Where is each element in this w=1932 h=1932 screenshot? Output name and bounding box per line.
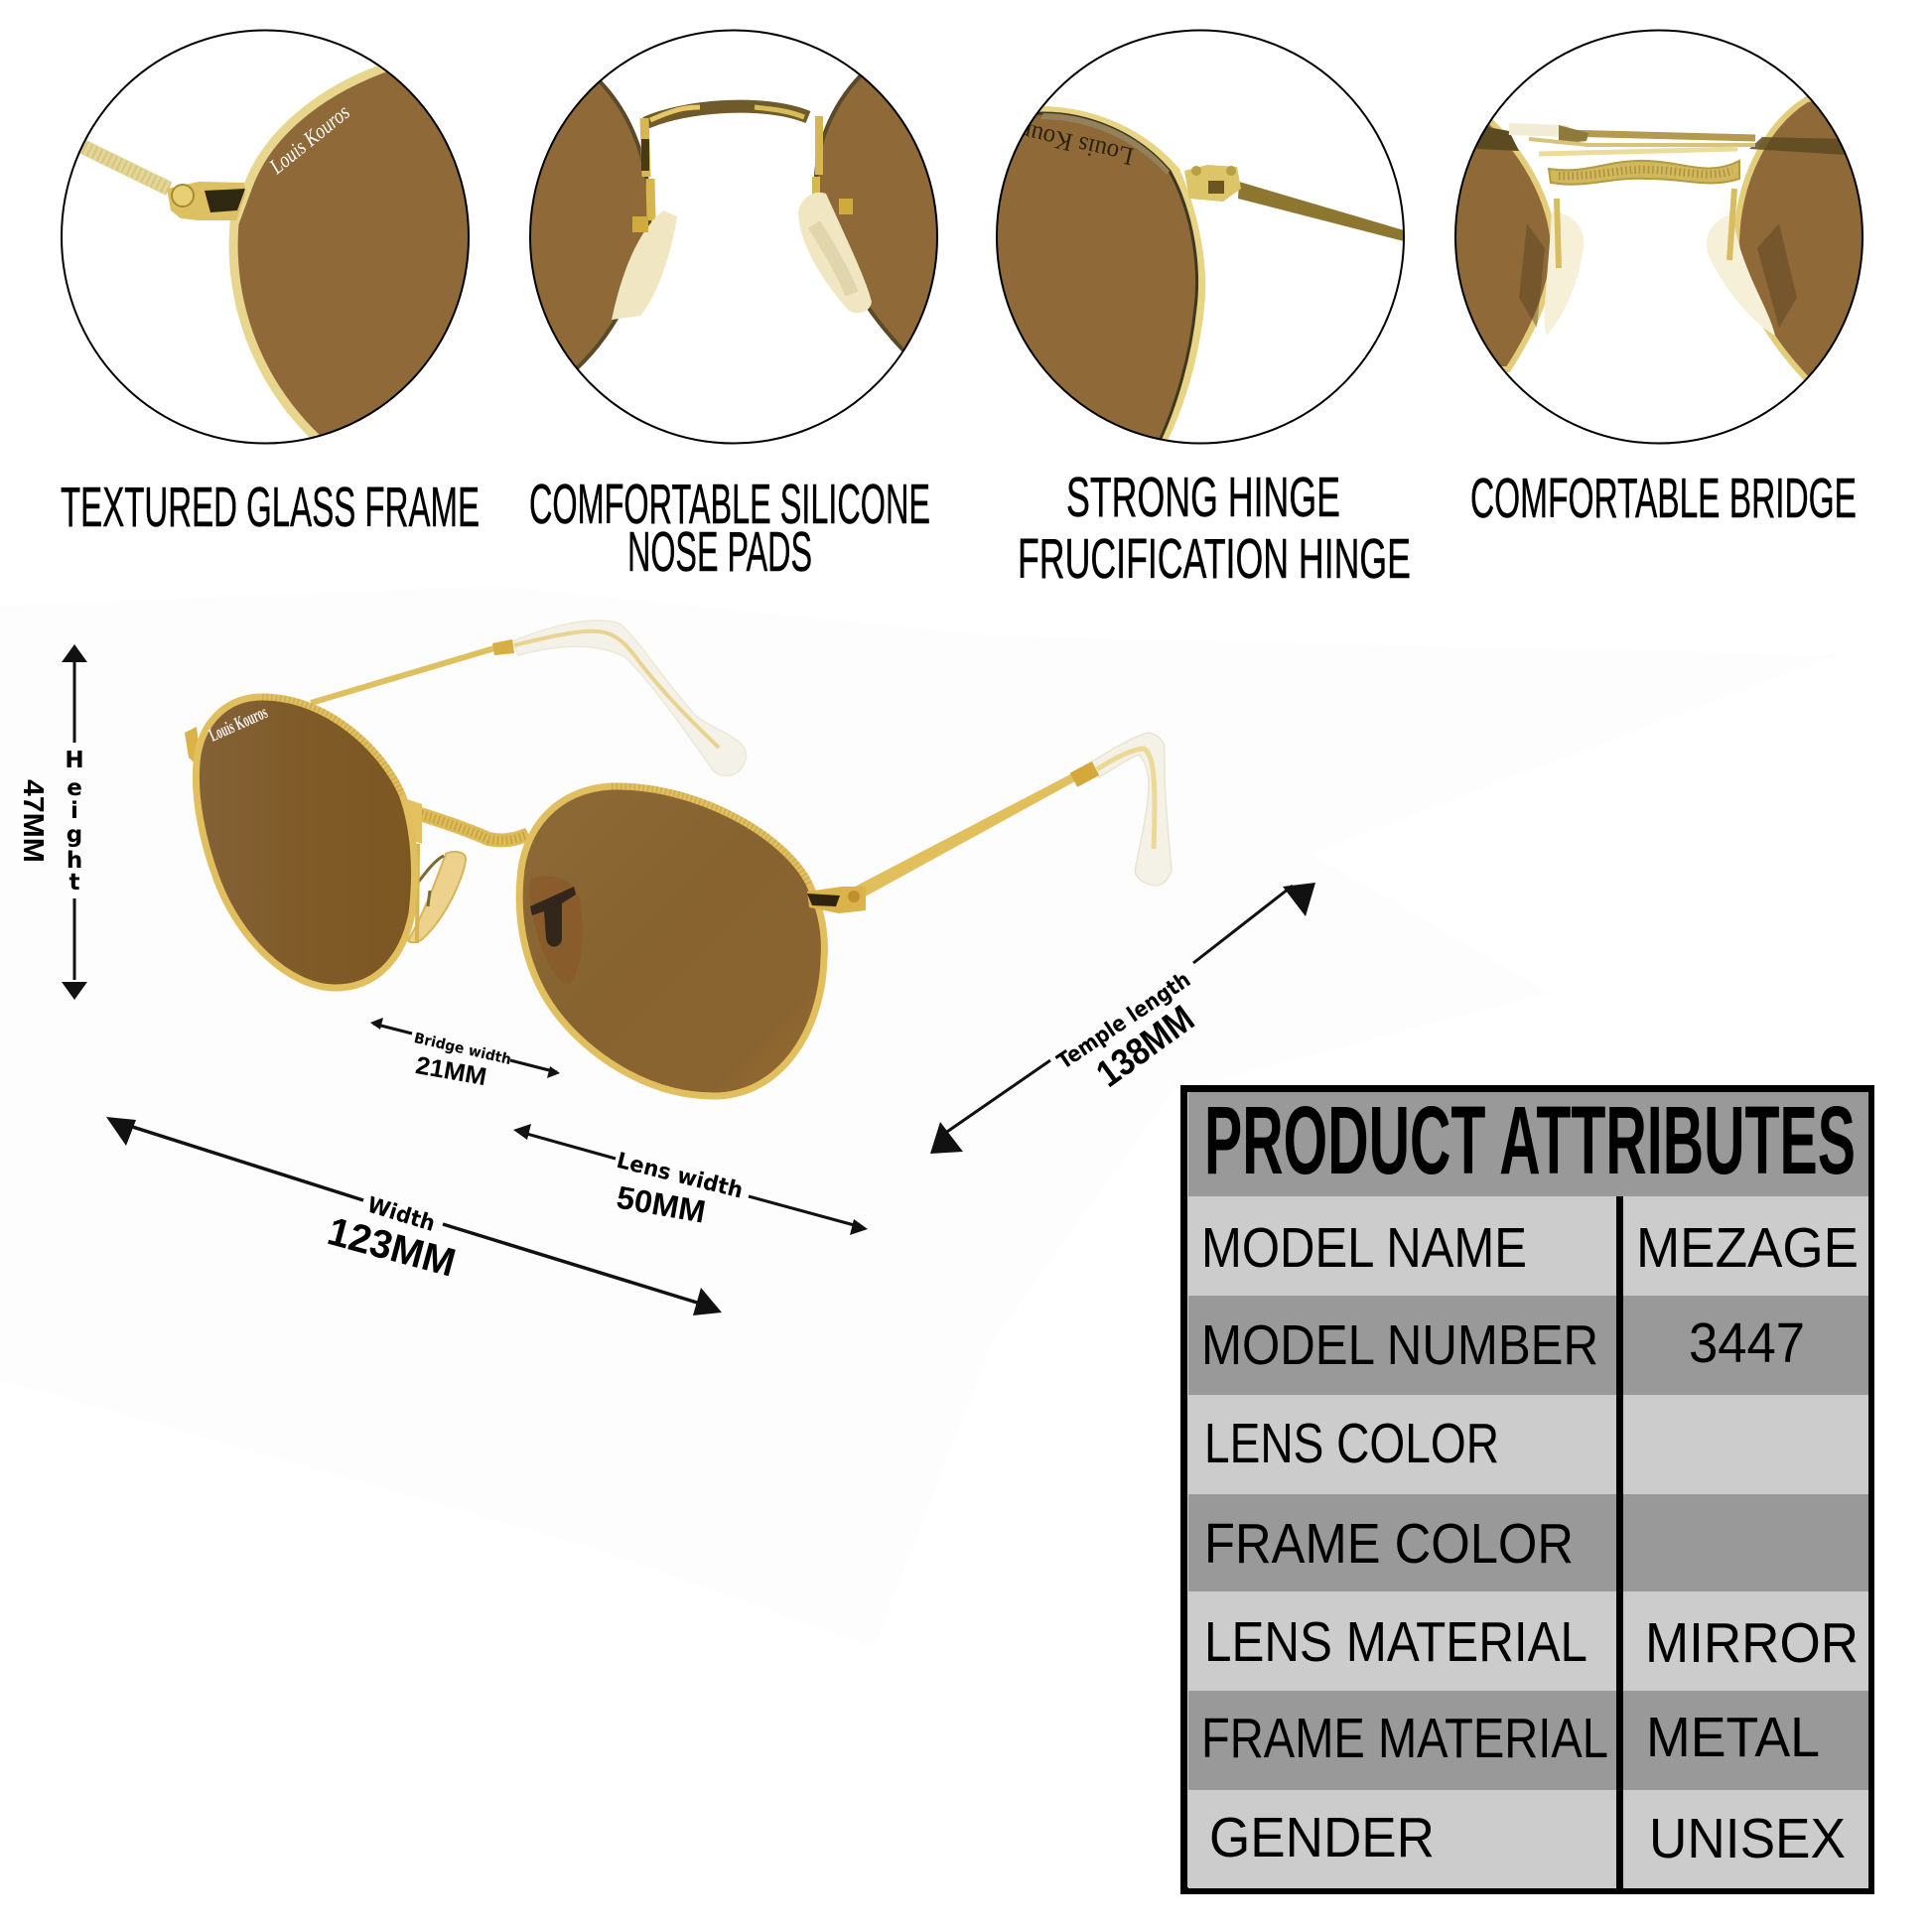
brand text on lens: Louis Kouros [264,99,354,179]
bridge width label: Bridge width [412,1031,512,1068]
detail circle: comfortable bridge [1449,30,1866,443]
row: model name: MODEL NAME [1201,1216,1527,1280]
product photo: sunglasses [185,621,1172,1096]
left hinge [185,727,202,769]
detail circle: strong hinge [983,30,1404,443]
right lens [519,786,824,1096]
dimension: lens width [513,1124,868,1235]
height label: i [70,798,78,824]
left lens [196,697,415,988]
far temple arm [311,621,747,775]
right hinge [807,887,866,913]
table column divider [1616,1196,1623,1888]
row: frame color: FRAME COLOR [1204,1512,1574,1576]
height label: e [67,775,82,801]
row: frame material: METAL [1646,1706,1820,1769]
caption: textured glass frame: TEXTURED GLASS FRAME [61,476,480,539]
dimension: overall width [106,1117,722,1315]
caption: strong hinge: STRONG HINGE [1066,466,1340,529]
height label: h [67,848,82,874]
lens width value: 50MM [614,1179,708,1230]
row: frame material [1188,1691,1868,1790]
row: gender: UNISEX [1649,1807,1846,1870]
caption: strong hinge: FRUCIFICATION HINGE [1018,527,1411,591]
dimension: temple length [930,883,1315,1154]
row: lens material: MIRROR [1645,1611,1859,1675]
caption: comfortable silicone nose pads: COMFORTABLE SILICONE [529,473,930,536]
width label: Width [364,1193,438,1237]
row: model name: MEZAGE [1636,1216,1859,1280]
product attributes table [1183,1086,1870,1890]
row: model number [1188,1296,1868,1395]
lens width label: Lens width [614,1149,746,1204]
dimension: height value: 47MM [17,779,49,863]
row: frame color [1188,1494,1868,1591]
row: lens material [1188,1591,1868,1691]
row: lens color [1188,1395,1868,1494]
mirrored brand text on lens: Louis Kouros [998,113,1136,171]
lens reflection [529,876,583,984]
bridge width value: 21MM [414,1051,488,1091]
brand text on left lens: Louis Kouros [206,702,271,747]
dimension: height arrow [62,644,87,1000]
dimension: bridge width [370,1018,560,1091]
row: frame material: FRAME MATERIAL [1201,1707,1608,1770]
height label: H [65,748,84,773]
height label: g [67,822,82,848]
caption: comfortable silicone nose pads [529,473,930,584]
row: gender [1188,1790,1868,1888]
faint background shape [0,586,1837,1648]
row: model number: MODEL NUMBER [1201,1313,1598,1377]
row: lens material: LENS MATERIAL [1204,1610,1587,1674]
nose pad [408,844,466,943]
temple length label: Temple length [1053,968,1195,1075]
temple length value: 138MM [1089,998,1202,1096]
near temple arm [855,733,1172,899]
height label: t [69,870,79,896]
row: model name [1188,1196,1868,1296]
detail circle: silicone nose pads [526,30,943,443]
caption: strong hinge [1018,466,1411,591]
row: model number: 3447 [1689,1311,1805,1375]
caption: comfortable silicone nose pads: NOSE PADS [627,520,812,584]
row: gender: GENDER [1209,1806,1435,1869]
detail circle: textured glass frame [62,30,477,447]
row: lens color: LENS COLOR [1204,1412,1499,1475]
width value: 123MM [323,1209,460,1286]
bridge [404,799,528,844]
